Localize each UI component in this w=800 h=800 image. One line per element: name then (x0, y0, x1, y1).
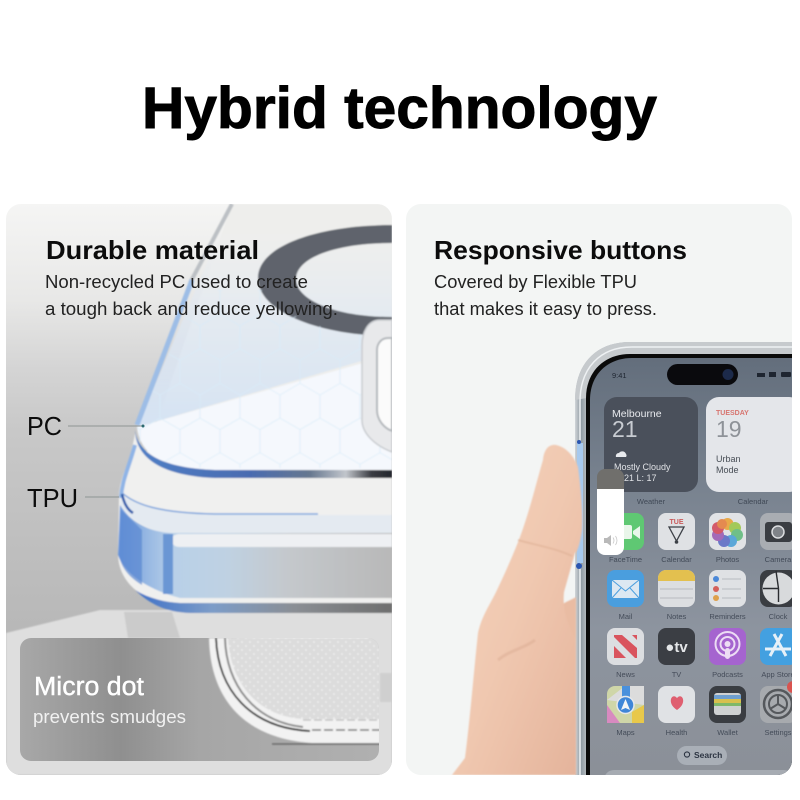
back plate edge (135, 430, 392, 478)
app: Calendar: TUE (670, 519, 684, 526)
app: TV (658, 628, 695, 679)
bumper dark accent (122, 494, 133, 513)
label: PC (29, 416, 144, 436)
case top shading (575, 342, 792, 400)
widget: weather: 21 (612, 416, 638, 442)
bumper clear band (120, 498, 392, 533)
floor (6, 610, 392, 775)
app: Reminders (709, 570, 746, 621)
app: News: News (616, 670, 635, 679)
app: Camera (760, 513, 797, 564)
inset subtext: prevents smudges (33, 706, 186, 727)
app: Mail: Mail (619, 612, 633, 621)
inset heading: Micro dot (34, 673, 144, 701)
body line 2: that makes it easy to press. (434, 298, 657, 319)
magnetic ring (258, 225, 392, 336)
status icons (757, 372, 791, 377)
bumper main (118, 505, 392, 598)
heading: durable material: Durable material (46, 235, 259, 265)
dashed edge upper (303, 719, 380, 721)
bumper left clear stroke (121, 445, 135, 498)
panel: responsive buttons (406, 204, 800, 790)
black bezel (586, 354, 792, 775)
widget: calendar: 19 (716, 416, 742, 442)
app: Wallet (709, 686, 746, 737)
app: Health: Health (666, 728, 687, 737)
dynamic island (667, 364, 738, 385)
widget: calendar: Mode (716, 465, 739, 475)
dotted surface (228, 638, 380, 719)
app: FaceTime (607, 513, 644, 564)
app: Notes: Notes (667, 612, 687, 621)
widget: weather: Mostly Cloudy (614, 462, 671, 472)
dashed edge (312, 729, 380, 731)
white outer band (209, 635, 380, 743)
screen (590, 358, 792, 775)
label: TPU (28, 489, 119, 508)
gray curve (225, 638, 303, 727)
label: TPU: TPU (27, 483, 78, 513)
app: TV: TV (672, 670, 681, 679)
heading: responsive buttons: Responsive buttons (434, 235, 687, 265)
blue button edge (577, 443, 583, 563)
widget: weather: Melbourne (612, 408, 662, 420)
case inner highlight (580, 347, 792, 775)
app: Camera: Camera (765, 555, 792, 564)
bumper top blue line (121, 492, 318, 514)
app: Wallet: Wallet (717, 728, 739, 737)
app: Health (658, 686, 695, 737)
widget: weather (604, 397, 698, 492)
app: Calendar (658, 513, 695, 564)
thumb and palm (452, 445, 582, 775)
back fingers (560, 597, 576, 640)
bumper highlight (172, 534, 392, 547)
widget: calendar (706, 397, 800, 492)
panel background (406, 204, 792, 775)
app: Photos: Photos (716, 555, 739, 564)
camera cutout inner (377, 338, 392, 431)
app: Settings (760, 681, 799, 737)
app: Maps (607, 686, 644, 737)
app: App Store (760, 628, 797, 679)
button blue dot top (577, 440, 581, 444)
app: Clock: Clock (769, 612, 788, 621)
widget: calendar: Urban (716, 454, 741, 464)
dock edge (604, 770, 794, 790)
clear glass lower (136, 364, 392, 470)
speaker icon (604, 535, 611, 546)
body line 2: a tough back and reduce yellowing. (45, 298, 338, 319)
clear case (575, 342, 792, 775)
side button on right (380, 673, 392, 702)
blue edge (137, 280, 192, 425)
button blue dot bottom (576, 563, 582, 569)
app: Reminders: Reminders (709, 612, 746, 621)
label: PC: PC (27, 411, 62, 441)
bumper bottom line (135, 590, 392, 613)
knuckle crease (518, 540, 572, 556)
hexagon pattern (137, 290, 392, 468)
widget: weather: 21 L: 17 (624, 473, 657, 483)
reflection on floor (124, 612, 180, 638)
app: Clock (760, 570, 797, 621)
app: FaceTime: FaceTime (609, 555, 642, 564)
camera cutout (362, 320, 392, 452)
app: News (607, 628, 644, 679)
volume slider (597, 469, 624, 555)
bumper left band (119, 510, 142, 585)
bumper vertical bands (163, 534, 173, 594)
micro dot inset (20, 635, 380, 761)
app: Podcasts: Podcasts (712, 670, 743, 679)
app: TV: ●tv (665, 639, 688, 656)
panel background (6, 204, 392, 775)
bumper base (118, 433, 392, 611)
body line 1: Covered by Flexible TPU (434, 271, 637, 292)
search pill: Search (694, 750, 722, 760)
app: Maps: Maps (616, 728, 635, 737)
blue glass tint (138, 302, 392, 427)
case photo (6, 204, 394, 775)
bottom shadow (272, 743, 380, 745)
app: Notes (658, 570, 695, 621)
widget labels: Weather (637, 497, 666, 506)
calendar widget label: Calendar (738, 497, 769, 506)
status time: 9:41 (612, 371, 627, 380)
app: Mail (607, 570, 644, 621)
widget: calendar: TUESDAY (716, 410, 749, 417)
light surface behind case (146, 224, 392, 456)
app: Photos (709, 513, 746, 564)
panel: durable material (6, 204, 394, 775)
title: Hybrid technology (142, 76, 657, 141)
hand (452, 445, 582, 775)
phone (575, 342, 800, 790)
app: Podcasts (709, 628, 746, 679)
palm crease (498, 640, 535, 660)
case side edge (190, 204, 232, 283)
body line 1: Non-recycled PC used to create (45, 271, 308, 292)
app: App Store: App Store (761, 670, 795, 679)
app: Settings: Settings (764, 728, 792, 737)
inset background (20, 638, 379, 761)
inset case corner (209, 635, 380, 744)
search pill (677, 746, 727, 765)
app: Calendar: Calendar (661, 555, 692, 564)
black curve (216, 638, 310, 731)
